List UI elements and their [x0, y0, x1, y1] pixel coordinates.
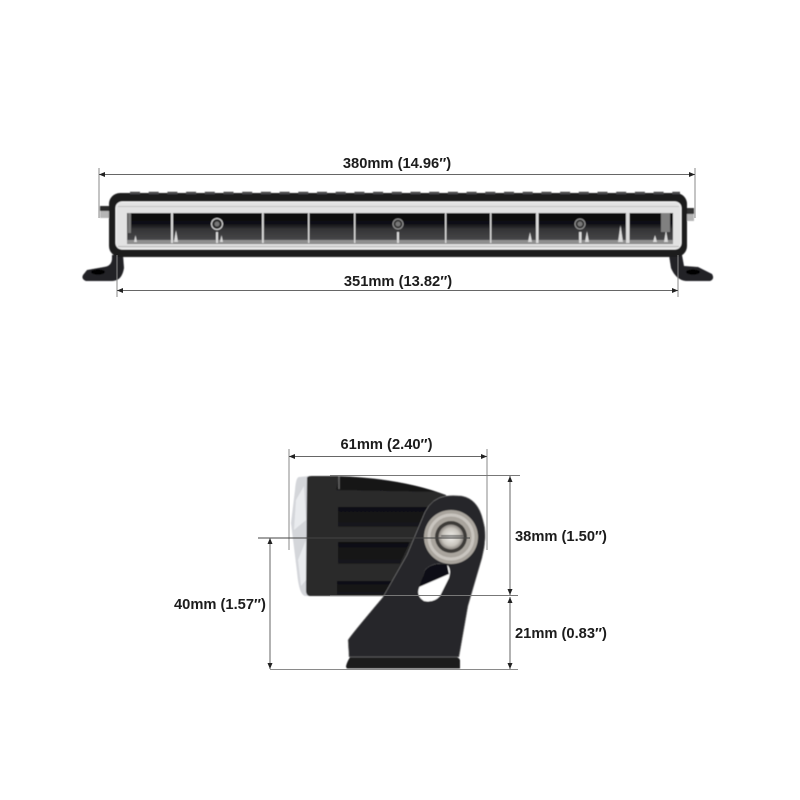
dark LED window — [127, 213, 673, 244]
dimension: 38mm housing height — [330, 476, 607, 596]
housing fins — [338, 507, 430, 527]
white lens frame — [116, 202, 681, 249]
mounting foot: left — [82, 255, 124, 281]
dimension: 21mm bracket height: 21mm (0.83″) — [515, 626, 607, 642]
dimension: 40mm centre height — [174, 538, 470, 669]
bar housing — [109, 193, 687, 257]
mount base — [346, 656, 460, 668]
dimension: 380mm overall length — [99, 156, 695, 218]
bracket — [348, 496, 485, 657]
dimension: 38mm housing height: 38mm (1.50″) — [515, 529, 607, 545]
end bolts — [100, 206, 109, 211]
mounting foot: right — [669, 255, 713, 281]
dimension: 21mm bracket height — [270, 597, 607, 670]
washer and bolt — [424, 510, 478, 564]
bracket slot — [418, 564, 450, 601]
lens sensors — [211, 218, 586, 230]
dimension: 351mm mount spacing: 351mm (13.82″) — [344, 274, 452, 290]
light side view — [291, 476, 485, 668]
light bar front view — [82, 193, 713, 281]
top ribs — [130, 192, 680, 194]
dimension: 61mm depth: 61mm (2.40″) — [341, 437, 433, 453]
dimension: 40mm centre height: 40mm (1.57″) — [174, 597, 266, 613]
dimension: 61mm depth — [289, 437, 487, 550]
dimension: 351mm mount spacing — [117, 255, 678, 297]
dimension: 380mm overall length: 380mm (14.96″) — [343, 156, 451, 172]
housing — [306, 476, 455, 596]
LED dividers — [128, 213, 670, 243]
lens — [291, 476, 310, 596]
